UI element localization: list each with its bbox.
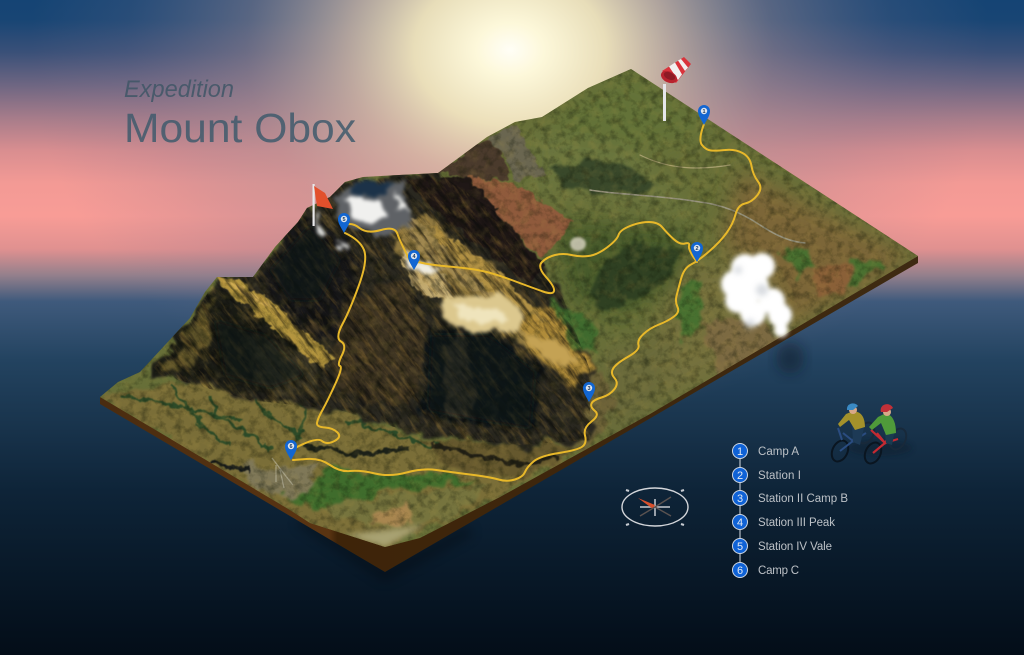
legend item 5: Station IV Vale [758, 541, 832, 553]
rust slope and dark face [405, 176, 575, 285]
legend item 6 [732, 562, 799, 578]
small cloud puff [570, 237, 586, 251]
cloud [721, 253, 804, 374]
back ridge [438, 125, 545, 180]
legend item 3: Station II Camp B [758, 493, 848, 505]
rock massif base [150, 173, 590, 445]
map pin 4 [408, 250, 420, 270]
stream fan near camp [272, 458, 293, 488]
map pin 6: 6 [289, 444, 293, 450]
sunlit ridges [217, 205, 550, 368]
legend item 6: Camp C [758, 565, 799, 577]
icon: compass [622, 488, 688, 526]
map pin 6 [285, 440, 297, 460]
cyclist shadow [848, 440, 912, 456]
streams [590, 155, 805, 243]
icon: two cyclists [829, 403, 912, 466]
map pin 1: 1 [702, 109, 706, 115]
rock streak texture [154, 174, 590, 445]
legend item 2: Station I [758, 470, 801, 482]
legend item 2 [732, 468, 801, 482]
legend item 6: 6 [737, 565, 743, 577]
map pin 3: 3 [587, 386, 591, 392]
corner soil lip [345, 525, 425, 547]
legend item 1 [732, 444, 799, 458]
green valley veins [120, 385, 560, 470]
map pin 2: 2 [695, 246, 699, 252]
cyclist: green jacket on red bike [862, 404, 909, 466]
legend [732, 444, 848, 578]
legend item 5: 5 [737, 541, 743, 553]
plains details [550, 160, 885, 380]
deep shadow faces [215, 225, 535, 428]
legend item 4: 4 [737, 517, 743, 529]
map pin 1 [698, 105, 710, 125]
route line [293, 124, 760, 481]
lower valley [100, 370, 617, 547]
terrain block [100, 69, 918, 576]
legend item 3 [732, 490, 848, 506]
subtitle: Expedition: Expedition [124, 76, 234, 103]
terrain surface [100, 69, 918, 547]
bright sunlit patch [445, 296, 580, 365]
map pin 3 [583, 382, 595, 402]
terrain shadow [300, 520, 470, 575]
legend item 1: Camp A [758, 446, 799, 458]
title [124, 76, 357, 151]
map pin 4: 4 [412, 254, 416, 260]
map pin 5 [338, 213, 350, 233]
legend item 3: 3 [737, 493, 743, 505]
map pin 5: 5 [342, 217, 346, 223]
legend item 2: 2 [737, 470, 743, 482]
terrain side walls [100, 256, 918, 572]
heading: Mount Obox: Mount Obox [124, 105, 357, 151]
global texture overlays [100, 69, 916, 546]
peak: grey rock, blue shadow and snow [315, 179, 438, 273]
icon: red summit flag [312, 184, 333, 226]
legend item 4: Station III Peak [758, 517, 835, 529]
rock faces [150, 212, 600, 432]
legend item 4 [732, 514, 835, 530]
cyclist: yellow jacket on blue bike [829, 403, 877, 464]
icon: windsock [659, 57, 691, 121]
legend item 5 [732, 538, 832, 554]
legend item 1: 1 [737, 446, 743, 458]
map pin 2 [691, 242, 703, 262]
plains colour zones [550, 70, 907, 393]
